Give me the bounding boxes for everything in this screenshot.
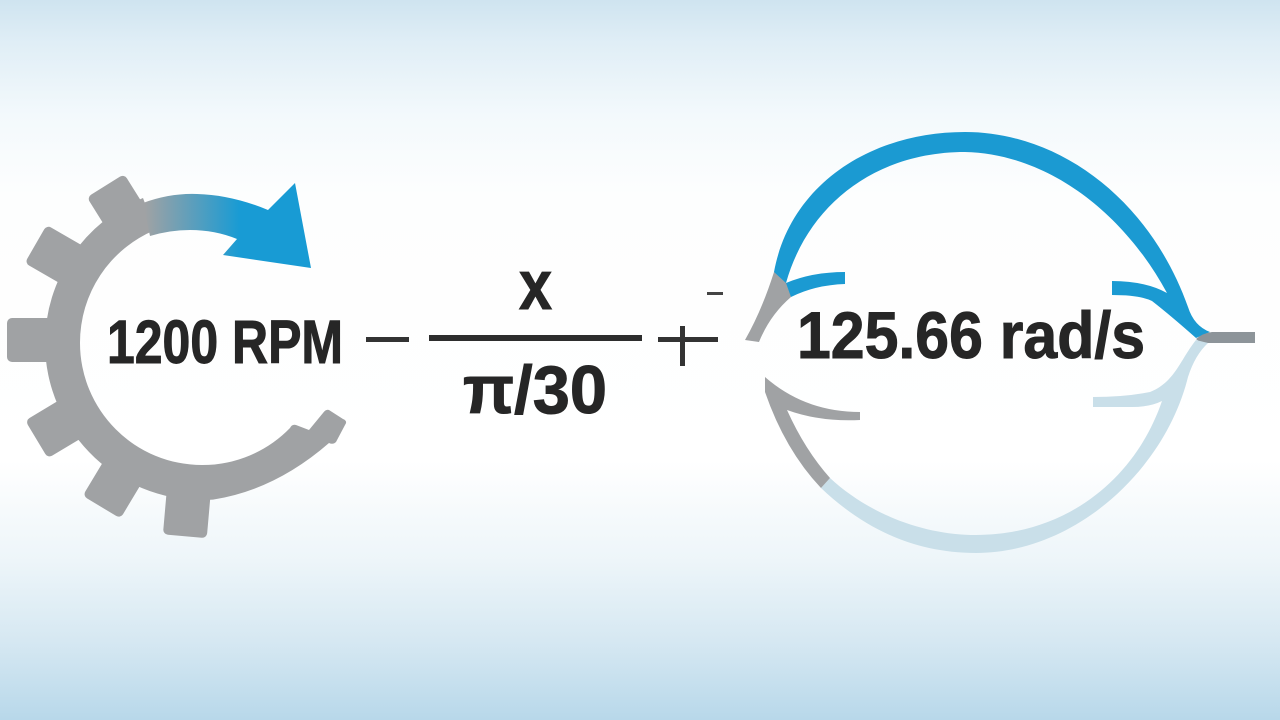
left grey stub — [745, 272, 791, 342]
fraction: x over pi/30 — [429, 246, 642, 428]
upper blue arc — [774, 132, 1210, 338]
fraction bar — [429, 335, 642, 341]
denominator: π/30 — [463, 352, 607, 428]
value: 1200 RPM: 1200 RPM — [107, 308, 343, 376]
gear ring — [45, 198, 346, 500]
lower grey arc — [765, 377, 860, 488]
rotation arrow — [143, 183, 311, 268]
value: 125.66 rad/s: 125.66 rad/s — [797, 298, 1145, 372]
stray mark — [707, 292, 723, 295]
right grey stub — [1196, 332, 1255, 343]
numerator: x — [519, 246, 552, 324]
minus sign — [366, 337, 409, 342]
plus sign — [658, 326, 718, 366]
circular arrows around result — [745, 132, 1255, 553]
gear teeth — [7, 174, 211, 538]
lower light arc — [821, 340, 1208, 553]
icon: gear with rotation arrow — [7, 174, 346, 538]
